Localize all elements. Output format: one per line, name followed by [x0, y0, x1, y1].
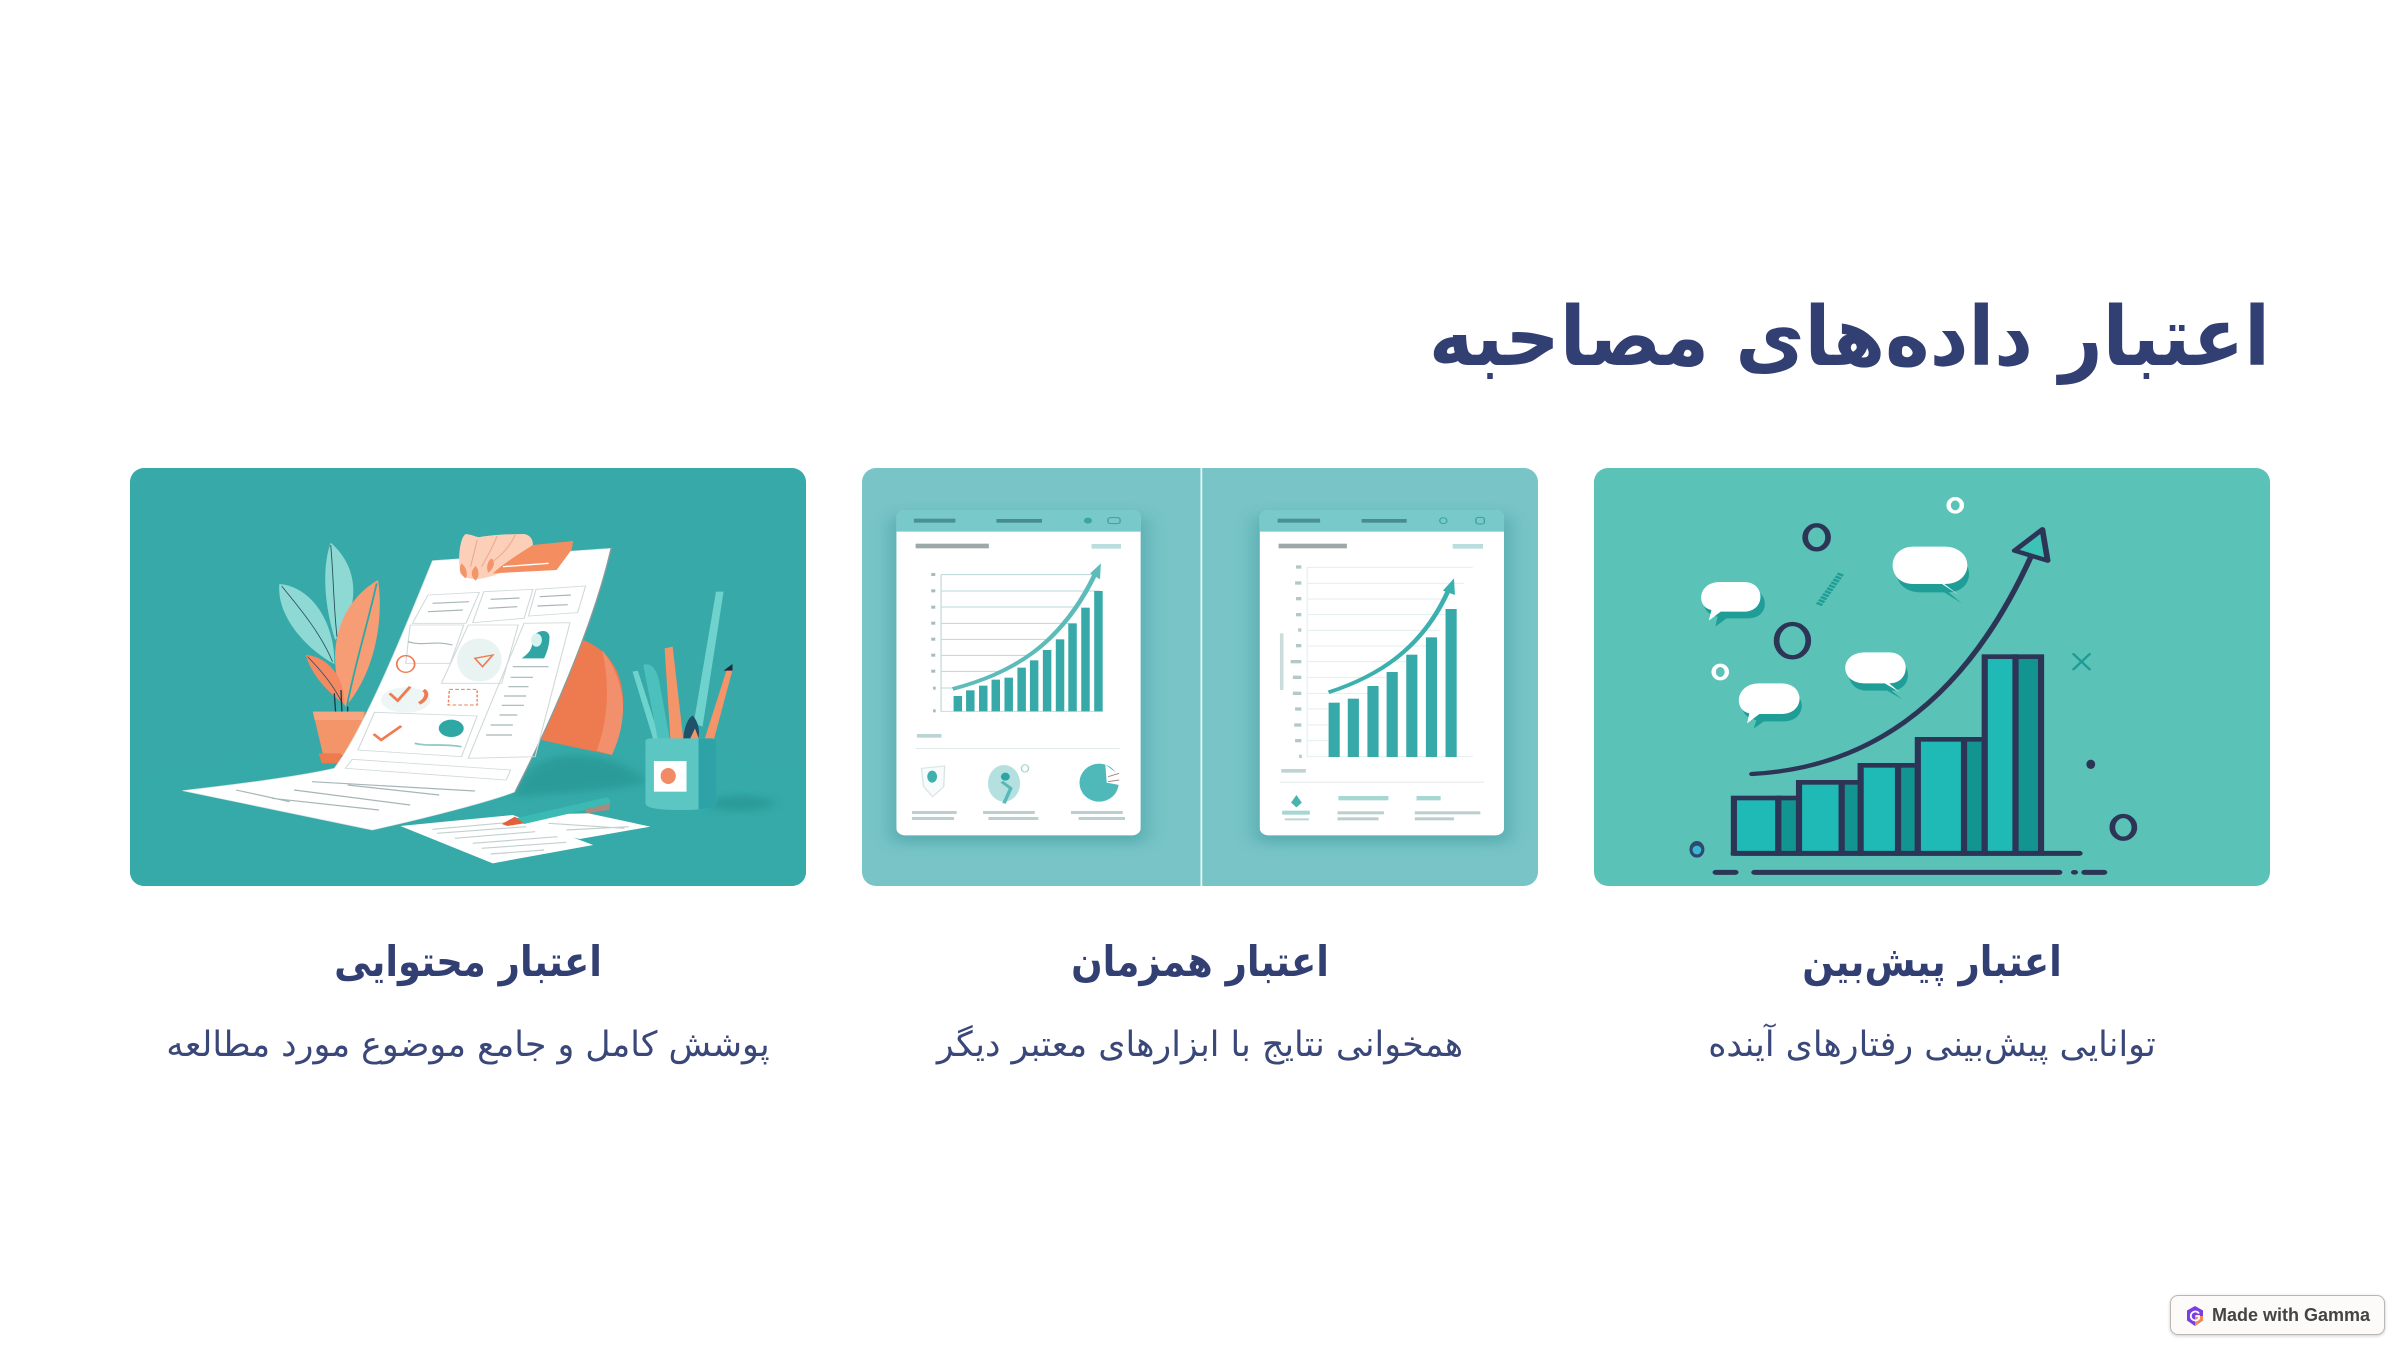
text: content validity description: پوشش کامل و جامع موضوع مورد مطالعه	[166, 1025, 770, 1065]
icon: floor shadow	[513, 755, 774, 811]
text: predictive validity description: توانایی پیش‌بینی رفتارهای آینده	[1708, 1025, 2156, 1065]
header marks	[914, 519, 1042, 523]
document boxes	[345, 586, 586, 780]
decorative rings and marks	[1689, 499, 2134, 858]
heading: concurrent validity: اعتبار همزمان	[1071, 937, 1329, 986]
portrait	[522, 631, 549, 658]
icon: gamma logo	[2187, 1306, 2203, 1326]
speech bubbles	[1701, 547, 1969, 729]
panel: predictive validity image	[1594, 468, 2270, 886]
icon: small sheets and marker	[400, 797, 650, 863]
header marks	[1278, 519, 1407, 523]
report page left	[891, 510, 1146, 843]
badge label: Made with Gamma	[2212, 1305, 2370, 1325]
icon: hanging document	[182, 548, 611, 830]
divider	[1200, 460, 1202, 900]
baseline	[1716, 853, 2104, 875]
badge: made with gamma	[2170, 1295, 2385, 1335]
report page right	[1254, 510, 1510, 843]
bar chart	[1734, 657, 2041, 853]
icon: orange shape	[540, 639, 623, 755]
heading: content validity: اعتبار محتوایی	[334, 937, 602, 986]
check marks	[374, 655, 493, 740]
icon: plant	[279, 543, 380, 713]
chart right	[1280, 565, 1473, 758]
heading: predictive validity: اعتبار پیش‌بین	[1802, 937, 2062, 986]
text: concurrent validity description: همخوانی نتایج با ابزارهای معتبر دیگر	[937, 1025, 1463, 1065]
small marks right	[1282, 795, 1480, 820]
icon: hand and clip	[459, 534, 573, 581]
floor	[120, 740, 820, 900]
trend arrow	[1752, 529, 2048, 774]
panel: content validity image	[130, 468, 806, 886]
icon: flower pot	[313, 712, 366, 763]
title: اعتبار داده‌های مصاحبه	[1429, 290, 2270, 385]
chart left	[931, 563, 1103, 712]
icon: pencil cup	[632, 592, 732, 810]
panel: concurrent validity image	[862, 468, 1538, 886]
small icons left	[921, 764, 1119, 803]
